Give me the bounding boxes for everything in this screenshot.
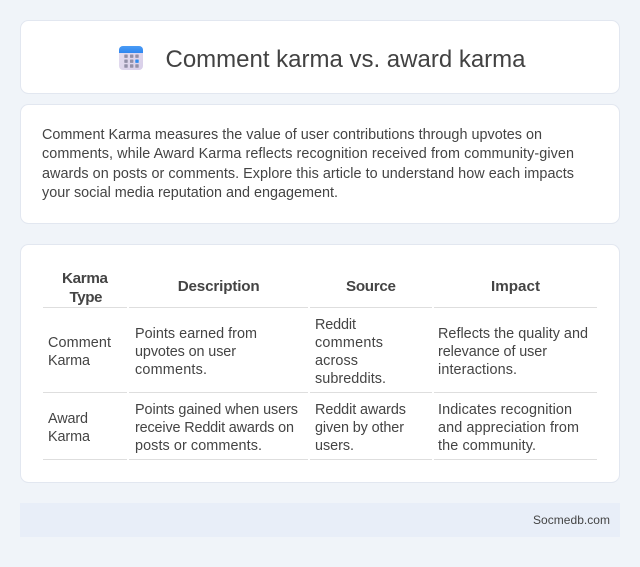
table row: comment karma: relevance of user [438, 344, 547, 360]
table header row: Type [70, 289, 102, 306]
table header row: Source [346, 278, 396, 295]
table row: comment karma: Reflects the quality and [438, 326, 588, 342]
icon: calendar [119, 46, 143, 70]
table row: comment karma: Reddit [315, 317, 356, 333]
table row: comment karma: across [315, 353, 358, 369]
panel: comparison table [20, 244, 620, 482]
table row: award karma: posts or comments. [135, 438, 262, 454]
table header row: Description [178, 278, 260, 295]
text block: introduction: Comment Karma measures the value of user contributions through upvotes on [42, 127, 542, 143]
table row: award karma: and appreciation from [438, 420, 579, 436]
table row: award karma: given by other [315, 420, 404, 436]
table header row [62, 270, 540, 306]
table row: award karma: Award [48, 411, 88, 427]
text block: introduction: awards on posts or comments. Explore this article to understand how each impacts [42, 166, 574, 182]
table row: comment karma: Points earned from [135, 326, 257, 342]
table row: comment karma: Comment [48, 335, 111, 351]
table row: comment karma: interactions. [438, 362, 517, 378]
table row: award karma [48, 402, 579, 454]
table row: comment karma [48, 317, 588, 387]
footer bar [20, 503, 620, 537]
table row: award karma: Reddit awards [315, 402, 406, 418]
table rules [43, 308, 597, 460]
panel: title card [20, 20, 620, 94]
table row: comment karma: upvotes on user [135, 344, 236, 360]
table row: comment karma: subreddits. [315, 371, 386, 387]
table header row: Impact [491, 278, 540, 295]
table row: award karma: receive Reddit awards on [135, 420, 294, 436]
table row: comment karma: comments. [135, 362, 207, 378]
text block: introduction: comments, while Award Karma reflects recognition received from community-given [42, 146, 574, 162]
table row: comment karma: Karma [48, 353, 90, 369]
table header row: Karma [62, 270, 109, 287]
table row: award karma: users. [315, 438, 354, 454]
table row: award karma: Karma [48, 429, 90, 445]
table row: comment karma: comments [315, 335, 383, 351]
table row: award karma: the community. [438, 438, 536, 454]
panel: introduction [20, 104, 620, 224]
table row: award karma: Points gained when users [135, 402, 298, 418]
text block: introduction [42, 127, 574, 201]
heading: Comment karma vs. award karma [166, 46, 526, 73]
text block: introduction: your social media reputation and engagement. [42, 185, 338, 201]
footer credit: Socmedb.com [533, 513, 610, 527]
table row: award karma: Indicates recognition [438, 402, 572, 418]
